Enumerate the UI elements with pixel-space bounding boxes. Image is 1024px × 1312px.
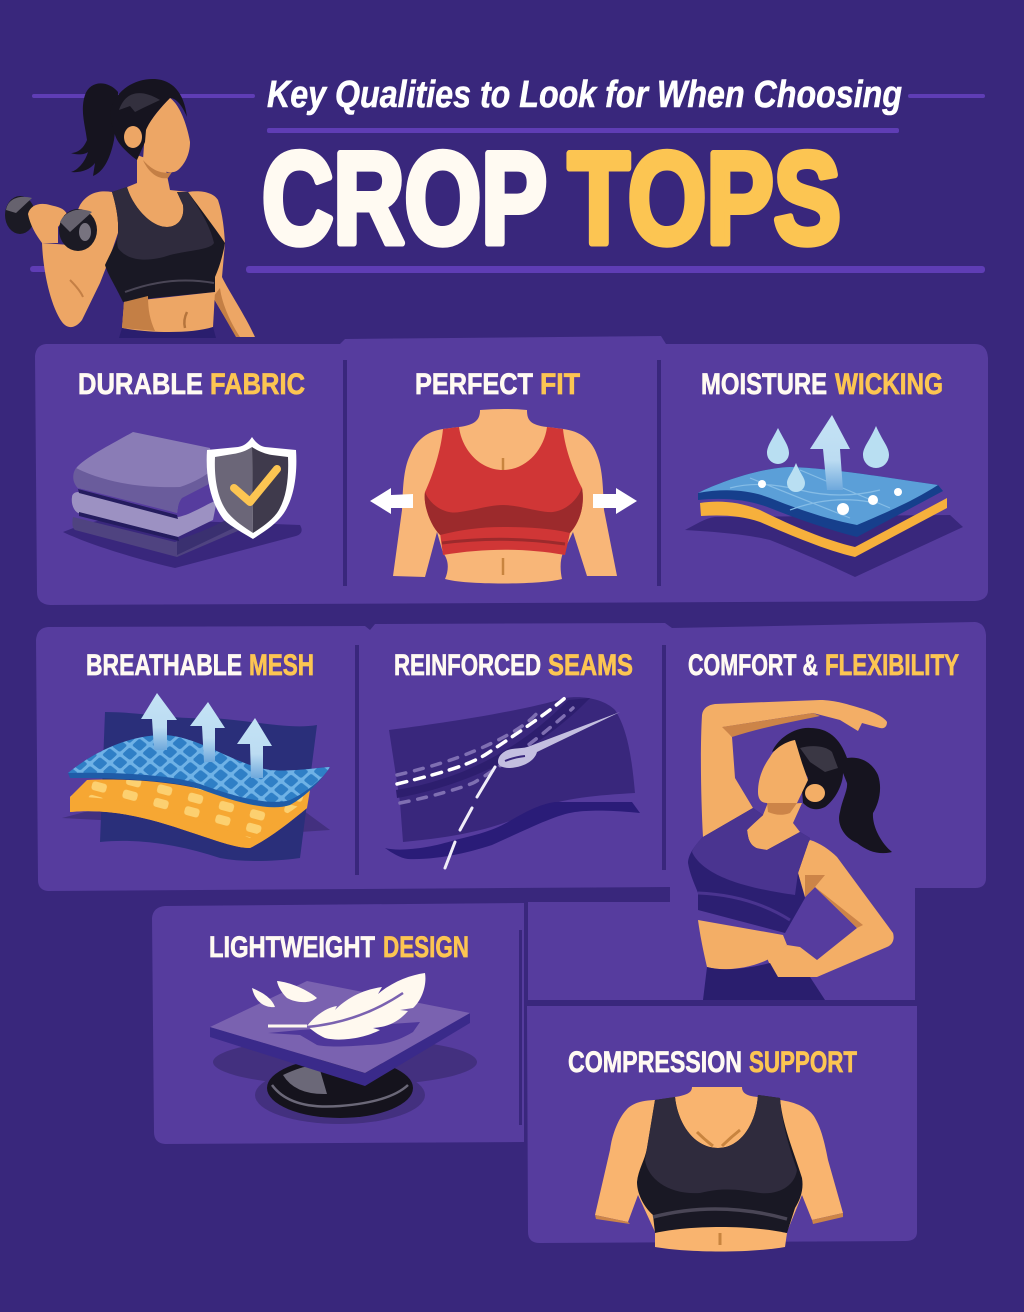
figure: woman with dumbbell [5,79,255,338]
icon: feather on platform [210,973,477,1124]
heading: perfect fit: FIT [540,368,580,401]
panel: compression support [527,1006,917,1252]
icon: red top fit [370,409,637,584]
heading: comfort and flexibility: FLEXIBILITY [825,649,959,682]
subtitle: Key Qualities to Look for When Choosing [267,74,902,116]
title [262,125,841,271]
heading: lightweight design: DESIGN [383,931,469,964]
heading: moisture wicking: MOISTURE [701,368,827,401]
heading: comfort and flexibility: COMFORT & [688,649,818,682]
heading: durable fabric [78,368,305,401]
panel: lightweight design [152,903,524,1144]
heading: durable fabric: FABRIC [210,368,305,401]
heading: reinforced seams: SEAMS [548,649,633,682]
title: CROP [262,125,547,271]
heading: compression support: SUPPORT [749,1046,857,1079]
heading: comfort and flexibility [688,649,959,682]
panel: middle row [36,622,986,1000]
heading: compression support: COMPRESSION [568,1046,742,1079]
icon: black compression top [595,1087,843,1252]
icon: folded fabric with shield [63,432,302,568]
heading: reinforced seams: REINFORCED [394,649,541,682]
figure: stretching woman [688,700,894,1000]
heading: breathable mesh: MESH [249,649,314,682]
icon: seam and needle [385,697,640,868]
icon: breathable mesh [62,693,330,861]
panel: top row [35,336,988,605]
heading: perfect fit: PERFECT [415,368,533,401]
icon: moisture wicking [685,415,963,577]
heading: lightweight design: LIGHTWEIGHT [209,931,375,964]
heading: moisture wicking: WICKING [835,368,943,401]
heading: durable fabric: DURABLE [78,368,203,401]
title: TOPS [568,125,841,271]
heading: moisture wicking [701,368,943,401]
heading: breathable mesh: BREATHABLE [86,649,242,682]
